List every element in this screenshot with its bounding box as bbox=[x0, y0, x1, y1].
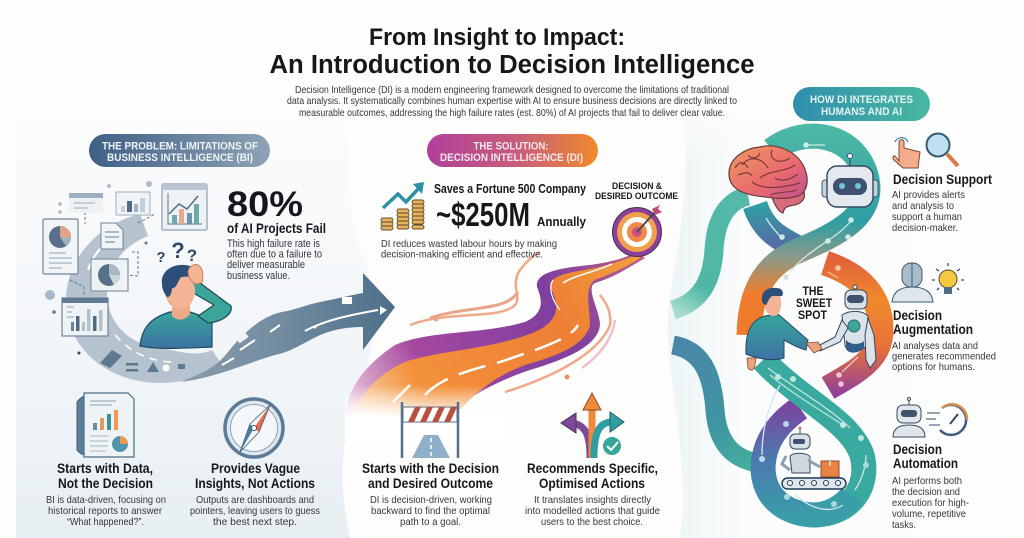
bottom item: recommends specific actions bbox=[525, 393, 660, 528]
block: decision automation: Decision bbox=[893, 441, 942, 457]
bottom item: starts with data: “What happened?”. bbox=[67, 516, 144, 528]
heading: the problem pill: THE PROBLEM: LIMITATIONS OF bbox=[102, 140, 258, 152]
stat: 80 percent: of AI Projects Fail bbox=[227, 220, 326, 236]
icon: compass bbox=[225, 399, 283, 457]
bottom item: recommends specific actions: Optimised Actions bbox=[539, 476, 645, 491]
label: decision and desired outcome bbox=[595, 181, 678, 202]
block: decision automation: volume, repetitive bbox=[892, 508, 966, 520]
icon: branching arrows with check bbox=[561, 393, 624, 458]
arrow: rough road to decision bbox=[180, 273, 395, 382]
stat: 250 million savings: Annually bbox=[537, 215, 586, 229]
bottom item: recommends specific actions: into modelled actions that guide bbox=[525, 505, 660, 517]
icon: target with dart bbox=[612, 205, 662, 256]
bottom item: starts with the decision: DI is decision-driven, working bbox=[370, 494, 492, 506]
icon: bar chart window bbox=[62, 298, 108, 336]
bottom item: starts with data: Starts with Data, bbox=[57, 461, 153, 476]
diagram: figure-eight integration ribbon bbox=[673, 136, 881, 515]
text: the sweet spot: SPOT bbox=[798, 308, 828, 322]
block: decision support: AI provides alerts bbox=[892, 189, 965, 201]
bottom item: vague insights: the best next step. bbox=[213, 516, 297, 528]
block: decision automation: tasks. bbox=[892, 519, 916, 531]
bottom item: vague insights: Insights, Not Actions bbox=[195, 476, 315, 491]
bottom item: recommends specific actions: users to the best choice. bbox=[541, 516, 643, 528]
title bbox=[270, 24, 754, 79]
bottom item: recommends specific actions: Recommends Specific, bbox=[527, 461, 658, 476]
text: the sweet spot: SWEET bbox=[796, 296, 833, 310]
icon: robot and speedometer bbox=[893, 398, 967, 437]
text: failure description: often due to a failure to bbox=[227, 248, 322, 260]
heading: the solution pill: DECISION INTELLIGENCE (DI) bbox=[440, 152, 583, 164]
icon: pie chart card bbox=[91, 259, 128, 291]
text: failure description: This high failure rate is bbox=[227, 238, 320, 250]
bottom item: starts with the decision: path to a goal. bbox=[400, 516, 461, 528]
block: decision support: Decision Support bbox=[893, 171, 992, 187]
block: decision augmentation: AI analyses data and bbox=[892, 340, 978, 352]
heading: the problem pill bbox=[89, 134, 270, 167]
bottom item: starts with data: historical reports to answer bbox=[48, 505, 162, 517]
icon: question marks bbox=[156, 238, 197, 266]
text: failure description: business value. bbox=[227, 270, 290, 282]
heading: how DI integrates pill bbox=[793, 87, 930, 121]
text: savings description: decision-making efficient and effective. bbox=[381, 248, 543, 260]
text: savings description bbox=[381, 238, 557, 260]
icon: banner card bbox=[69, 193, 103, 213]
icon: line chart dashboard bbox=[162, 184, 207, 230]
bottom item: starts with the decision: and Desired Outcome bbox=[368, 476, 493, 491]
block: decision automation bbox=[892, 441, 969, 531]
intro text block: data analysis. It systematically combines human expertise with AI to ensure business decisions are directly linked to bbox=[287, 95, 737, 107]
icon: bar chart card bbox=[116, 192, 150, 215]
block: decision automation: the decision and bbox=[892, 486, 960, 498]
illustration: grey data swirl bbox=[45, 181, 220, 383]
icon: robot head bbox=[822, 154, 878, 207]
intro text block: Decision Intelligence (DI) is a modern engineering framework designed to overcome the limitations of traditional bbox=[295, 84, 729, 96]
bottom item: starts with data: Not the Decision bbox=[58, 476, 153, 491]
bottom item: starts with data: BI is data-driven, focusing on bbox=[46, 494, 166, 506]
icon: pie report page bbox=[43, 219, 78, 274]
bottom item: starts with data bbox=[46, 393, 166, 528]
intro text block: measurable outcomes, addressing the high failure rates (est. 80%) of AI projects that fail to deliver clear value. bbox=[299, 107, 725, 119]
block: decision support: decision-maker. bbox=[892, 222, 958, 234]
block: decision automation: Automation bbox=[893, 455, 958, 471]
block: decision augmentation: generates recommended bbox=[892, 350, 996, 362]
block: decision augmentation: Augmentation bbox=[893, 321, 973, 337]
label: decision and desired outcome: DECISION & bbox=[612, 181, 662, 192]
icon: brain bbox=[729, 146, 807, 213]
block: decision augmentation: options for humans. bbox=[892, 361, 975, 373]
block: decision automation: AI performs both bbox=[892, 475, 962, 487]
illustration: confused person bbox=[140, 264, 231, 348]
icon: robot bust and lightbulb bbox=[892, 263, 964, 302]
text: failure description bbox=[227, 238, 322, 282]
label: decision and desired outcome: DESIRED OUTCOME bbox=[595, 191, 678, 202]
block: decision support: support a human bbox=[892, 211, 962, 223]
illustration: robot at conveyor belt bbox=[782, 426, 846, 489]
icon: road barrier bbox=[402, 402, 458, 458]
panel: integration background bbox=[668, 78, 1008, 538]
bottom item: starts with the decision: backward to find the optimal bbox=[371, 505, 490, 517]
stat: 250 million savings bbox=[434, 182, 586, 233]
bottom item: starts with the decision bbox=[362, 402, 499, 528]
title: An Introduction to Decision Intelligence bbox=[270, 51, 754, 79]
block: decision support bbox=[892, 171, 992, 234]
text: failure description: deliver measurable bbox=[227, 259, 305, 271]
bottom item: recommends specific actions: It translates insights directly bbox=[534, 494, 652, 506]
illustration: human and robot handshake bbox=[746, 285, 876, 370]
bottom item: vague insights bbox=[190, 399, 320, 528]
block: decision automation: execution for high- bbox=[892, 497, 969, 509]
icon: report with charts bbox=[77, 393, 134, 457]
text: savings description: DI reduces wasted labour hours by making bbox=[381, 238, 557, 250]
icon: question marks: ? bbox=[171, 238, 185, 263]
text: the sweet spot bbox=[796, 284, 833, 322]
heading: the problem pill: BUSINESS INTELLIGENCE (BI) bbox=[107, 152, 253, 164]
text: the sweet spot: THE bbox=[802, 284, 824, 298]
heading: how DI integrates pill: HOW DI INTEGRATES bbox=[810, 94, 913, 106]
title: From Insight to Impact: bbox=[369, 24, 625, 51]
heading: the solution pill: THE SOLUTION: bbox=[474, 140, 548, 152]
panel: the problem background bbox=[16, 78, 374, 538]
heading: the solution pill bbox=[427, 134, 598, 167]
icon: coins and rising arrow bbox=[381, 182, 424, 230]
bottom item: vague insights: pointers, leaving users to guess bbox=[190, 505, 320, 517]
icon: document bbox=[101, 223, 123, 249]
icon: question marks: ? bbox=[187, 246, 197, 265]
icon: question marks: ? bbox=[156, 249, 166, 266]
bottom item: vague insights: Provides Vague bbox=[211, 461, 300, 476]
block: decision augmentation bbox=[892, 307, 996, 373]
block: decision augmentation: Decision bbox=[893, 307, 942, 323]
stat: 80 percent bbox=[227, 185, 326, 236]
stat: 250 million savings: Saves a Fortune 500 Company bbox=[434, 182, 586, 196]
illustration: winding decision road bbox=[345, 252, 645, 445]
block: decision support: and analysis to bbox=[892, 200, 954, 212]
bottom item: vague insights: Outputs are dashboards and bbox=[196, 494, 314, 506]
icon: pointing hand and magnifier bbox=[893, 134, 958, 168]
stat: 80 percent: 80% bbox=[227, 185, 303, 224]
stat: 250 million savings: ~$250M bbox=[436, 196, 530, 233]
bottom item: starts with the decision: Starts with the Decision bbox=[362, 461, 499, 476]
intro text block bbox=[287, 84, 737, 119]
heading: how DI integrates pill: HUMANS AND AI bbox=[821, 106, 902, 118]
